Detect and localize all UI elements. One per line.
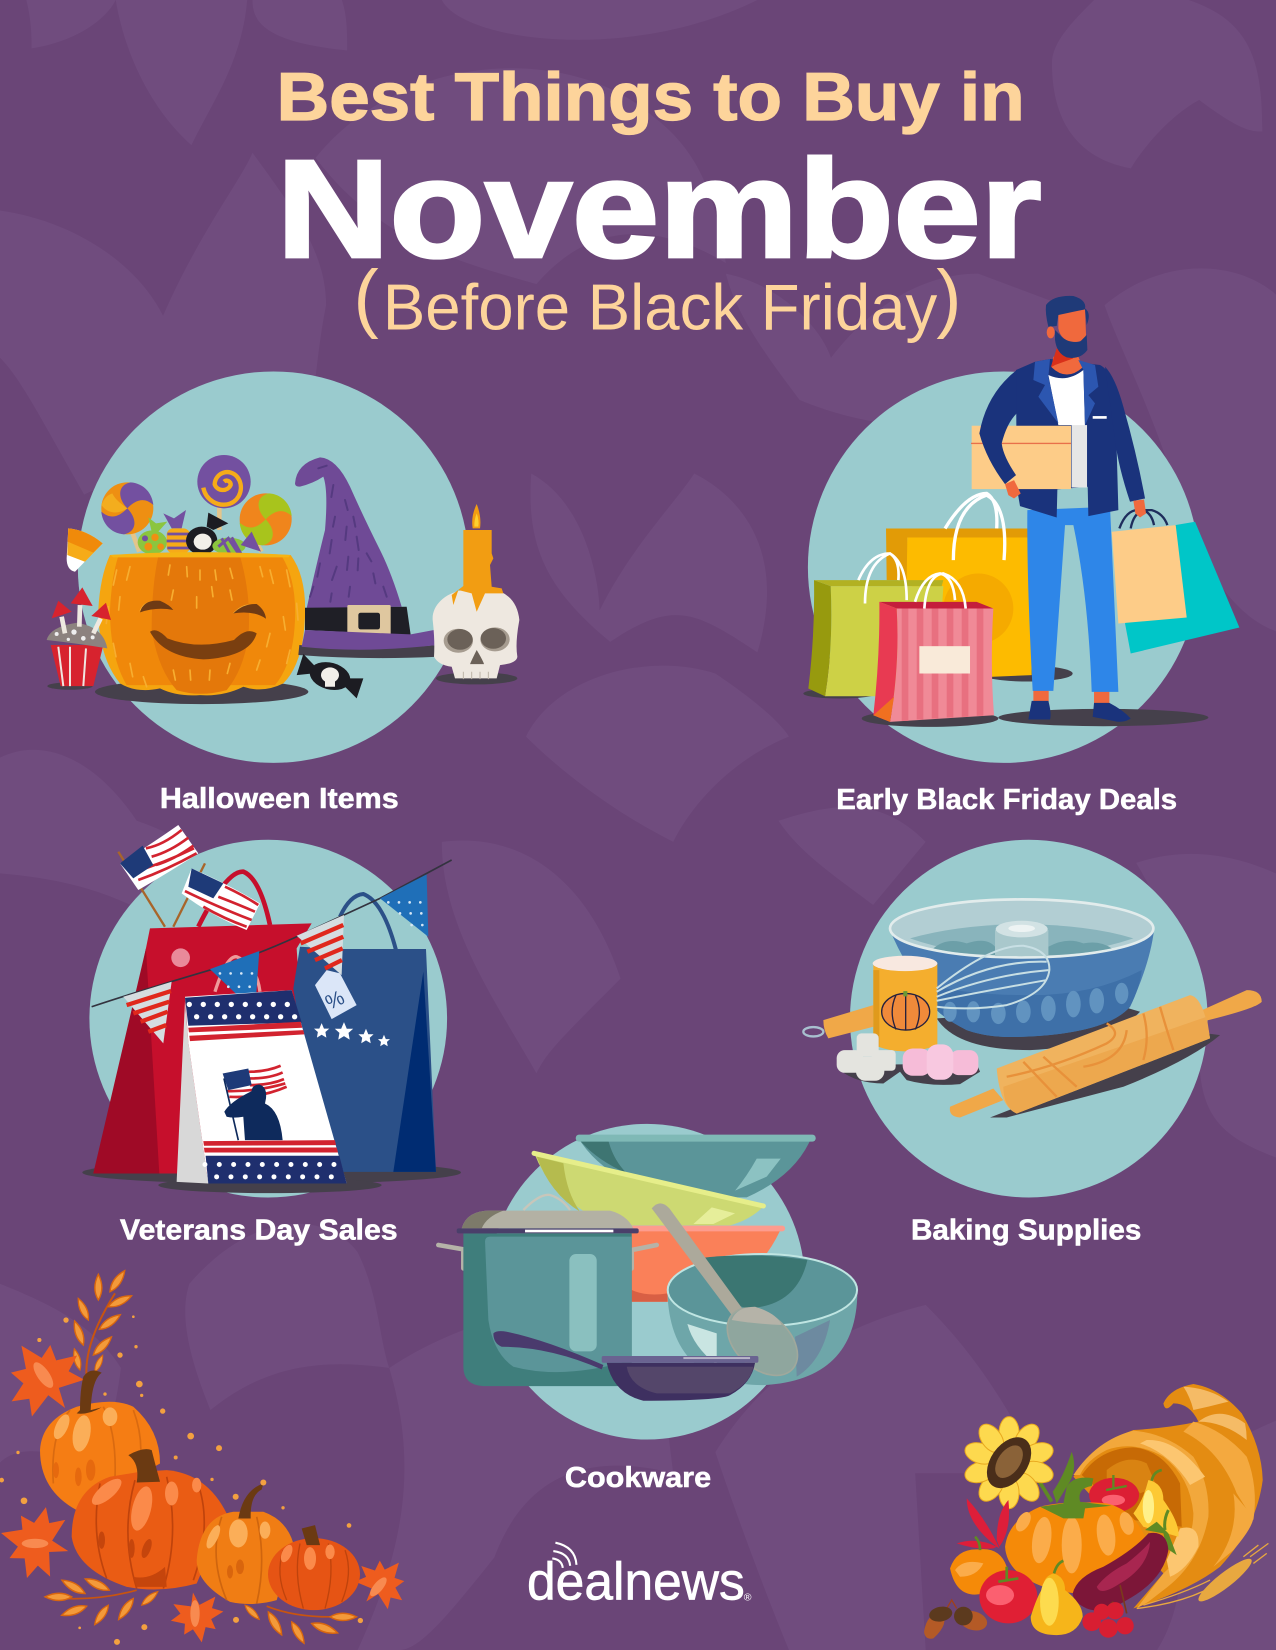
subheading: Before Black Friday: ) bbox=[936, 255, 961, 340]
icon: yellow bowl bbox=[534, 1153, 763, 1225]
subheading: Before Black Friday: ( bbox=[353, 255, 379, 340]
icon: large rolling pin bbox=[950, 990, 1262, 1117]
label: Early Black Friday Deals bbox=[836, 784, 1177, 816]
icon: large orange pumpkin bbox=[40, 1370, 160, 1510]
label: Baking Supplies bbox=[911, 1215, 1141, 1247]
panel: cookware bbox=[438, 1124, 857, 1494]
panel: baking supplies bbox=[803, 840, 1262, 1247]
icon: witch hat bbox=[295, 457, 437, 658]
illustration: cornucopia bbox=[924, 1384, 1268, 1639]
label: Veterans Day Sales bbox=[120, 1215, 398, 1247]
icon: bundt pan bbox=[890, 899, 1154, 1050]
heading: Best Things to Buy in: Best Things to Buy in bbox=[277, 60, 1025, 135]
icon: flags bbox=[120, 825, 260, 930]
icon: eggplant bbox=[1073, 1510, 1177, 1611]
figure: man bbox=[971, 296, 1146, 722]
icon: green shopping bag bbox=[808, 553, 943, 696]
illustration: Veterans Day group bbox=[82, 825, 461, 1193]
icon: yellow pear bbox=[1031, 1561, 1083, 1635]
icon: striped pennant bbox=[297, 915, 344, 975]
label: Cookware bbox=[565, 1462, 711, 1494]
registered mark: ® bbox=[744, 1592, 752, 1604]
icon: pear in horn bbox=[1133, 1470, 1179, 1537]
logo: dealnews: dealnews bbox=[527, 1552, 745, 1611]
icon: ladle bbox=[652, 1203, 810, 1389]
icon: ground shadow bbox=[82, 1161, 461, 1193]
illustration: cookware group bbox=[438, 1135, 857, 1401]
icon: green leaf bbox=[1053, 1452, 1074, 1503]
icon: glass bowl bbox=[667, 1254, 857, 1385]
icon: ground shadows bbox=[803, 666, 1208, 727]
icon: leaf branch bbox=[71, 1269, 133, 1378]
icon: wheat bbox=[1137, 1543, 1268, 1608]
icon: price tag bbox=[315, 970, 357, 1019]
icon: whisk bbox=[937, 946, 1049, 1008]
icon: bunting bbox=[92, 860, 452, 1043]
icon: orange pumpkin bbox=[197, 1483, 293, 1604]
icon: yellow shopping bag bbox=[886, 493, 1032, 677]
icon: small red pumpkin bbox=[268, 1525, 360, 1610]
illustration: baking group bbox=[803, 899, 1262, 1117]
icon: marshmallows bbox=[837, 1033, 980, 1085]
icon: pumpkin bbox=[1005, 1478, 1146, 1593]
icon: pumpkin bbox=[95, 552, 308, 704]
icon: sunflower bbox=[962, 1417, 1056, 1509]
icon: bags in right hand bbox=[1112, 510, 1239, 654]
illustration: Halloween group bbox=[47, 455, 519, 704]
icon: bottom leaves bbox=[45, 1576, 357, 1645]
icon: price tag: % bbox=[322, 986, 348, 1015]
subheading: Before Black Friday: Before Black Friday bbox=[383, 270, 938, 343]
illustration: pumpkins and autumn leaves bbox=[0, 1269, 419, 1647]
icon: skull candy bbox=[297, 654, 363, 698]
specks bbox=[0, 1315, 363, 1645]
icon: cupcake bbox=[47, 587, 111, 690]
icon: frying pan bbox=[493, 1331, 758, 1401]
icon: red shopping bag bbox=[93, 872, 330, 1173]
title bbox=[277, 60, 1041, 343]
panel: Early Black Friday deals bbox=[803, 296, 1239, 816]
icon: skull with candle bbox=[433, 504, 519, 684]
icon: central red-orange pumpkin bbox=[72, 1449, 227, 1589]
panel: Veterans Day sales bbox=[82, 825, 461, 1247]
icon: berries bbox=[1082, 1585, 1134, 1638]
icon: orange apple bbox=[950, 1537, 1007, 1595]
icon: stock pot bbox=[438, 1195, 657, 1386]
icon: veterans poster bbox=[177, 990, 347, 1183]
icon: maple leaves bbox=[0, 1323, 419, 1647]
icon: small rolling pin bbox=[803, 1005, 873, 1038]
illustration: man with bags bbox=[803, 296, 1239, 727]
icon: horn bbox=[1073, 1384, 1263, 1608]
icon: acorns bbox=[924, 1600, 989, 1639]
label: Halloween Items bbox=[160, 783, 399, 815]
icon: signal arcs bbox=[552, 1543, 576, 1568]
icon: pink shopping bag bbox=[873, 573, 994, 722]
icon: teal mixing bowl bbox=[576, 1135, 816, 1197]
icon: wrapped candies bbox=[138, 510, 261, 555]
icon: apple in horn bbox=[1089, 1475, 1139, 1512]
panel: Halloween items bbox=[47, 371, 519, 815]
icon: lollipops bbox=[101, 455, 292, 552]
icon: candy corn bbox=[67, 528, 103, 572]
heading: November: November bbox=[277, 132, 1041, 287]
icon: red autumn leaf bbox=[957, 1498, 1009, 1549]
icon: carried box bbox=[971, 426, 1071, 489]
icon: blue shopping bag bbox=[293, 894, 436, 1172]
icon: red apple bbox=[979, 1567, 1037, 1623]
icon: salmon bowl bbox=[627, 1226, 785, 1302]
icon: flag sticks bbox=[118, 852, 205, 927]
icon: pumpkin can bbox=[873, 956, 937, 1051]
